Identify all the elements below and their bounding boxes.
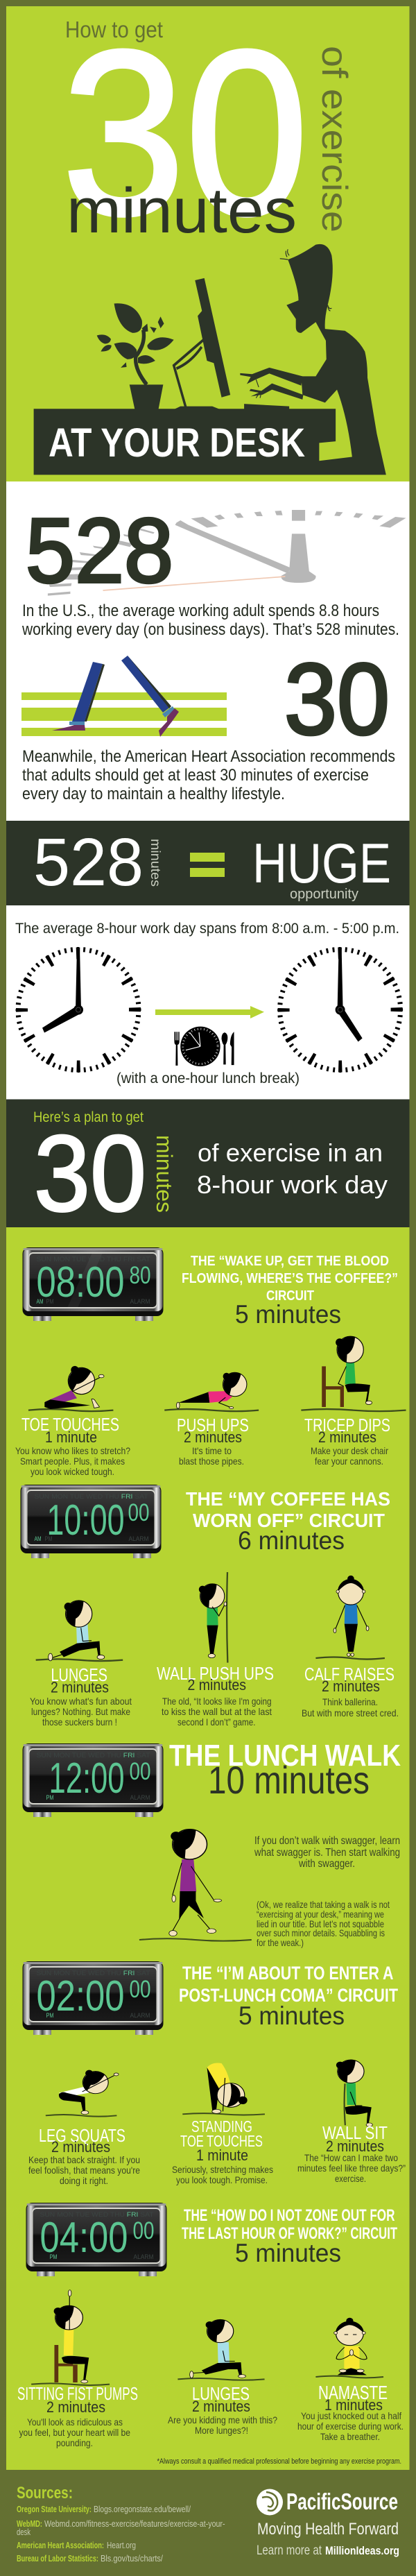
exercise: leg squats: feel foolish, that means you're <box>28 2165 140 2176</box>
text: of exercise: 8-hour work day <box>197 1170 388 1199</box>
figure: wall push ups <box>199 1572 227 1663</box>
exercise: standing toe touches: TOE TOUCHES <box>180 2132 263 2150</box>
dark background <box>6 1099 409 1227</box>
exercise: lunges: 2 minutes <box>192 2398 250 2415</box>
circuit heading <box>182 2206 397 2243</box>
text: heart association: every day to maintain a healthy lifestyle. <box>22 785 285 803</box>
digital clock 08:00: 08:00 <box>36 1259 125 1306</box>
illustration: walking legs on stripes <box>21 656 227 737</box>
exercise: calf raises: Think ballerina. <box>322 1696 378 1707</box>
text: swagger: with swagger. <box>298 1858 355 1870</box>
source: webmd: Webmd.com/fitness-exercise/features/exercise-at-your- <box>44 2518 225 2529</box>
source: bureau of labor statistics: Bureau of Labor Statistics: <box>17 2553 98 2564</box>
number 528: 528 <box>33 824 144 900</box>
digital clock 08:00: PM <box>46 1298 54 1305</box>
clock: 8 o'clock <box>18 948 139 1070</box>
monitor arm <box>174 339 205 407</box>
hair curls <box>280 249 331 311</box>
exercise: namaste: You just knocked out a half <box>301 2410 401 2421</box>
exercise: tricep dips: fear your cannons. <box>315 1456 383 1467</box>
figure: calf raises <box>315 1576 385 1660</box>
exercise: wall sit: exercise. <box>335 2173 366 2184</box>
exercise: leg squats: 2 minutes <box>51 2138 110 2156</box>
circuit heading <box>182 1254 398 1304</box>
equals sign <box>190 853 225 877</box>
digital clock 02:00: PM <box>46 2012 54 2019</box>
exercise: wall push ups <box>157 1663 274 1728</box>
exercise: namaste: Take a breather. <box>320 2431 380 2442</box>
number 30: 30 <box>34 1114 146 1234</box>
digital clock 10:00: ALARM <box>129 1535 148 1542</box>
figure: push ups <box>164 1370 259 1411</box>
text: average work day: The average 8-hour work day spans from 8:00 a.m. - 5:00 p.m. <box>15 921 399 937</box>
clock: 5 o'clock <box>280 948 401 1070</box>
source: oregon state: Oregon State University: <box>17 2504 92 2514</box>
section: 8am circuit <box>15 1247 406 1477</box>
exercise: lunges: LUNGES <box>192 2383 250 2404</box>
exercise: toe touches: TOE TOUCHES <box>21 1414 119 1435</box>
section: 4pm circuit <box>17 2203 404 2466</box>
figure: walking <box>139 1829 252 1941</box>
digital clock 08:00: ALARM <box>130 1298 150 1305</box>
digital clock 04:00: 04:00 <box>40 2214 128 2262</box>
section: lunch walk <box>22 1739 401 1948</box>
exercise: tricep dips <box>304 1415 390 1467</box>
circuit duration: 5 minutes <box>235 2239 341 2267</box>
exercise: tricep dips: Make your desk chair <box>311 1445 388 1456</box>
text: heart association <box>22 747 395 803</box>
exercise: standing toe touches: Seriously, stretching makes <box>172 2164 273 2175</box>
caption: lunch break: (with a one-hour lunch break) <box>116 1071 300 1086</box>
arrow <box>155 1006 264 1018</box>
panel: 528 and 30 facts <box>6 481 409 821</box>
figures row <box>46 2060 372 2126</box>
digital clock 02:00: 02:00 <box>36 1972 125 2020</box>
exercise: toe touches: You know who likes to stretch? <box>15 1445 130 1456</box>
heading: sources: Sources: <box>17 2484 73 2502</box>
exercise: toe touches <box>15 1414 130 1477</box>
exercise: sitting fist pumps: you feel, but your heart will be <box>19 2427 130 2438</box>
circuit heading: THE “MY COFFEE HAS <box>186 1488 390 1510</box>
gauge second hand <box>103 577 285 590</box>
exercise: leg squats <box>28 2125 140 2186</box>
exercise: wall push ups: WALL PUSH UPS <box>157 1663 274 1684</box>
text: of exercise: of exercise in an <box>198 1138 383 1167</box>
section: 2pm circuit <box>22 1961 406 2186</box>
figure: tricep dips <box>301 1336 406 1411</box>
arms and hands <box>240 368 303 400</box>
exercise: calf raises: But with more street cred. <box>302 1707 399 1718</box>
person and desk silhouette <box>34 244 386 475</box>
figure: namaste <box>315 2318 383 2378</box>
digital clock 02:00: SUN MON TUE WED THU FRI SAT <box>36 1970 150 1977</box>
figure: toe touches <box>28 1363 113 1411</box>
source: webmd: WebMD: <box>17 2518 42 2529</box>
exercise: push ups: blast those pipes. <box>179 1456 244 1467</box>
source: oregon state <box>17 2504 191 2514</box>
source: american heart association: American Heart Association: <box>17 2540 104 2550</box>
digital clock 12:00: ALARM <box>130 1794 150 1801</box>
figure: lunges <box>36 1601 123 1661</box>
digital clock 10:00: PM <box>44 1535 53 1542</box>
text: work hours <box>21 602 399 639</box>
source: oregon state: Blogs.oregonstate.edu/bewell/ <box>94 2504 191 2514</box>
digital clock 10:00 <box>21 1485 161 1558</box>
text: of exercise <box>197 1138 388 1199</box>
panel: the plan <box>6 1099 409 1234</box>
digital clock 12:00: PM <box>46 1794 54 1801</box>
exercise: tricep dips: 2 minutes <box>318 1428 376 1446</box>
white background <box>6 905 409 1099</box>
cuffs <box>69 706 175 725</box>
circuit heading: WORN OFF” CIRCUIT <box>193 1510 385 1531</box>
rotated label: minutes: minutes <box>148 839 162 887</box>
digital clock 10:00: AM <box>35 1535 42 1542</box>
exercise: namaste: 1 minutes <box>324 2396 383 2414</box>
digital clock 04:00: PM <box>50 2253 57 2260</box>
digital clock 10:00: SUN MON TUE WED THU FRI SAT <box>35 1493 148 1500</box>
digital clock 08:00: SUN MON TUE WED THU FRI SAT <box>36 1256 150 1263</box>
figure: sitting fist pumps <box>31 2290 110 2385</box>
exercise: push ups: PUSH UPS <box>177 1415 249 1435</box>
number 30: 30 <box>284 642 390 756</box>
panel: sources footer <box>17 2484 399 2564</box>
digital clock 08:00: AM <box>36 1298 43 1305</box>
exercise: sitting fist pumps: 2 minutes <box>46 2398 105 2416</box>
exercise: push ups <box>177 1415 249 1467</box>
digital clock 04:00: SUN MON TUE WED THU FRI SAT <box>40 2211 154 2218</box>
exercise: wall sit <box>297 2122 406 2184</box>
monitor <box>195 278 230 398</box>
digital clock 12:00 <box>22 1743 164 1817</box>
source: webmd: desk <box>17 2527 31 2537</box>
source: webmd <box>17 2518 225 2537</box>
dark background <box>6 821 409 905</box>
learn more: MillionIdeas.org <box>325 2544 399 2557</box>
text: note about title <box>257 1899 390 1948</box>
figure: lunges <box>177 2319 265 2380</box>
exercise: lunges: lunges? Nothing. But make <box>31 1706 130 1717</box>
digital clock 12:00: 12:00 <box>49 1755 125 1802</box>
exercise: wall sit: 2 minutes <box>326 2138 384 2155</box>
circuit duration: 5 minutes <box>239 2002 345 2030</box>
text: note about title: lied in our title. But let’s not squabble <box>257 1918 384 1929</box>
section: 10am circuit <box>21 1485 399 1728</box>
heading: minutes: minutes <box>67 176 297 246</box>
text: swagger <box>254 1835 400 1870</box>
digital clock 08:00: 80 <box>129 1262 151 1289</box>
word: huge: HUGE <box>252 833 391 895</box>
heading: how to get: How to get <box>65 17 163 42</box>
digital clock 02:00: 00 <box>129 1976 151 2003</box>
digital clock 04:00 <box>26 2203 166 2276</box>
exercise: wall sit: WALL SIT <box>322 2122 388 2143</box>
source: american heart association: Heart.org <box>107 2540 136 2550</box>
exercise: wall push ups: The old, “It looks like I'm going <box>162 1696 272 1707</box>
exercise: calf raises: 2 minutes <box>322 1678 380 1695</box>
exercise: lunges: LUNGES <box>51 1664 107 1685</box>
legs <box>72 656 171 722</box>
digital clock 08:00 <box>22 1247 164 1321</box>
figures row <box>28 1336 406 1411</box>
exercise: toe touches: 1 minute <box>45 1428 97 1446</box>
exercise: push ups: 2 minutes <box>184 1428 242 1446</box>
exercise: standing toe touches <box>172 2117 273 2185</box>
figure: leg squats <box>46 2067 119 2117</box>
exercise: standing toe touches: 1 minute <box>196 2147 248 2164</box>
white background <box>6 481 409 821</box>
circuit duration: 6 minutes <box>238 1526 345 1555</box>
figures row <box>31 2290 383 2385</box>
illustration: person at desk <box>34 244 386 475</box>
gauge ticks <box>48 510 406 596</box>
digital clock 10:00: 00 <box>128 1499 150 1526</box>
panel: title hero <box>34 1 386 475</box>
exercise: sitting fist pumps <box>17 2383 138 2448</box>
digital clock 12:00: 00 <box>129 1758 151 1785</box>
digital clock 04:00: 00 <box>133 2217 154 2244</box>
panel: 528 equals huge <box>6 821 409 905</box>
circuit heading <box>179 1963 398 2006</box>
circuit heading: CIRCUIT <box>266 1288 314 1304</box>
word: opportunity: opportunity <box>290 887 358 902</box>
exercise: lunges: those suckers burn ! <box>42 1716 117 1728</box>
exercise: push ups: It's time to <box>192 1445 232 1456</box>
heading: of exercise: of exercise <box>314 46 354 232</box>
exercise: standing toe touches: you look tough. Promise. <box>176 2174 268 2185</box>
text: note about title: over such minor details. Squabbling is <box>257 1927 385 1938</box>
exercise: standing toe touches: STANDING <box>191 2117 252 2135</box>
exercise: namaste: NAMASTE <box>318 2382 388 2403</box>
circuit duration: 5 minutes <box>235 1300 341 1329</box>
digital clock 02:00 <box>22 1961 164 2035</box>
digital clock 02:00: ALARM <box>130 2012 150 2019</box>
exercise: calf raises <box>302 1664 399 1718</box>
source: bureau of labor statistics: Bls.gov/tus/charts/ <box>101 2553 163 2564</box>
illustration: gauge clock <box>48 510 406 596</box>
exercise: toe touches: Smart people. Plus, it makes <box>20 1456 125 1467</box>
circuit heading <box>186 1488 390 1531</box>
figure: wall sit <box>336 2060 372 2126</box>
keyboard <box>244 404 289 409</box>
exercise: wall push ups: 2 minutes <box>187 1676 246 1694</box>
number 528: 528 <box>26 500 173 602</box>
rotated label: minutes: minutes <box>152 1135 177 1213</box>
exercise: lunges <box>30 1664 132 1728</box>
lime stripes <box>21 692 227 736</box>
learn more: Learn more at <box>257 2543 322 2558</box>
exercise: lunges <box>168 2383 277 2436</box>
panel: work day clocks <box>6 905 409 1099</box>
exercise: lunges: 2 minutes <box>51 1679 109 1696</box>
shoes <box>52 708 179 737</box>
heading: big 30: 30 <box>62 1 309 264</box>
text: note about title: for the weak.) <box>257 1937 304 1948</box>
exercise: leg squats: LEG SQUATS <box>39 2125 125 2146</box>
exercise: lunges: More lunges?! <box>195 2425 248 2436</box>
heading: at your desk: AT YOUR DESK <box>49 420 305 466</box>
exercise: tricep dips: TRICEP DIPS <box>304 1415 390 1435</box>
figures row <box>36 1572 385 1663</box>
exercise: leg squats: Keep that back straight. If you <box>28 2154 140 2165</box>
text: note about title: “exercising at your desk,” meaning we <box>257 1909 384 1920</box>
exercise: wall push ups: second I don’t” game. <box>177 1716 255 1728</box>
exercise: sitting fist pumps: pounding. <box>56 2437 93 2448</box>
plant leaves <box>97 303 174 368</box>
gauge hands <box>281 534 316 583</box>
digital clock 12:00: SUN MON TUE WED THU FRI SAT <box>36 1752 150 1759</box>
plant stem <box>136 330 147 384</box>
figure: standing toe touches <box>182 2063 265 2115</box>
text: heart association: that adults should get at least 30 minutes of exercise <box>22 766 369 785</box>
exercise: toe touches: you look wicked tough. <box>31 1466 114 1477</box>
exercise: sitting fist pumps: You'll look as ridiculous as <box>27 2416 123 2428</box>
exercise: namaste <box>297 2382 404 2442</box>
icon: lunch plate clock <box>174 1027 234 1066</box>
learn more <box>257 2543 399 2558</box>
logo: pacificsource swirl <box>257 2489 283 2516</box>
circuit heading: THE “WAKE UP, GET THE BLOOD <box>191 1254 389 1269</box>
exercise: wall push ups: to kiss the wall but at the last <box>162 1706 272 1717</box>
exercise: wall sit: The “How can I make two <box>304 2152 398 2163</box>
text: here's a plan: Here’s a plan to get <box>33 1109 144 1125</box>
exercise: lunges: Are you kidding me with this? <box>168 2414 277 2425</box>
exercise: leg squats: doing it right. <box>60 2175 108 2186</box>
digital clock 04:00: ALARM <box>133 2253 154 2260</box>
exercise: lunges: You know what's fun about <box>30 1696 132 1707</box>
plant pot <box>130 384 163 409</box>
digital clock 10:00: 10:00 <box>47 1496 125 1544</box>
circuit duration: 10 minutes <box>208 1758 370 1802</box>
exercise: sitting fist pumps: SITTING FIST PUMPS <box>17 2383 138 2404</box>
